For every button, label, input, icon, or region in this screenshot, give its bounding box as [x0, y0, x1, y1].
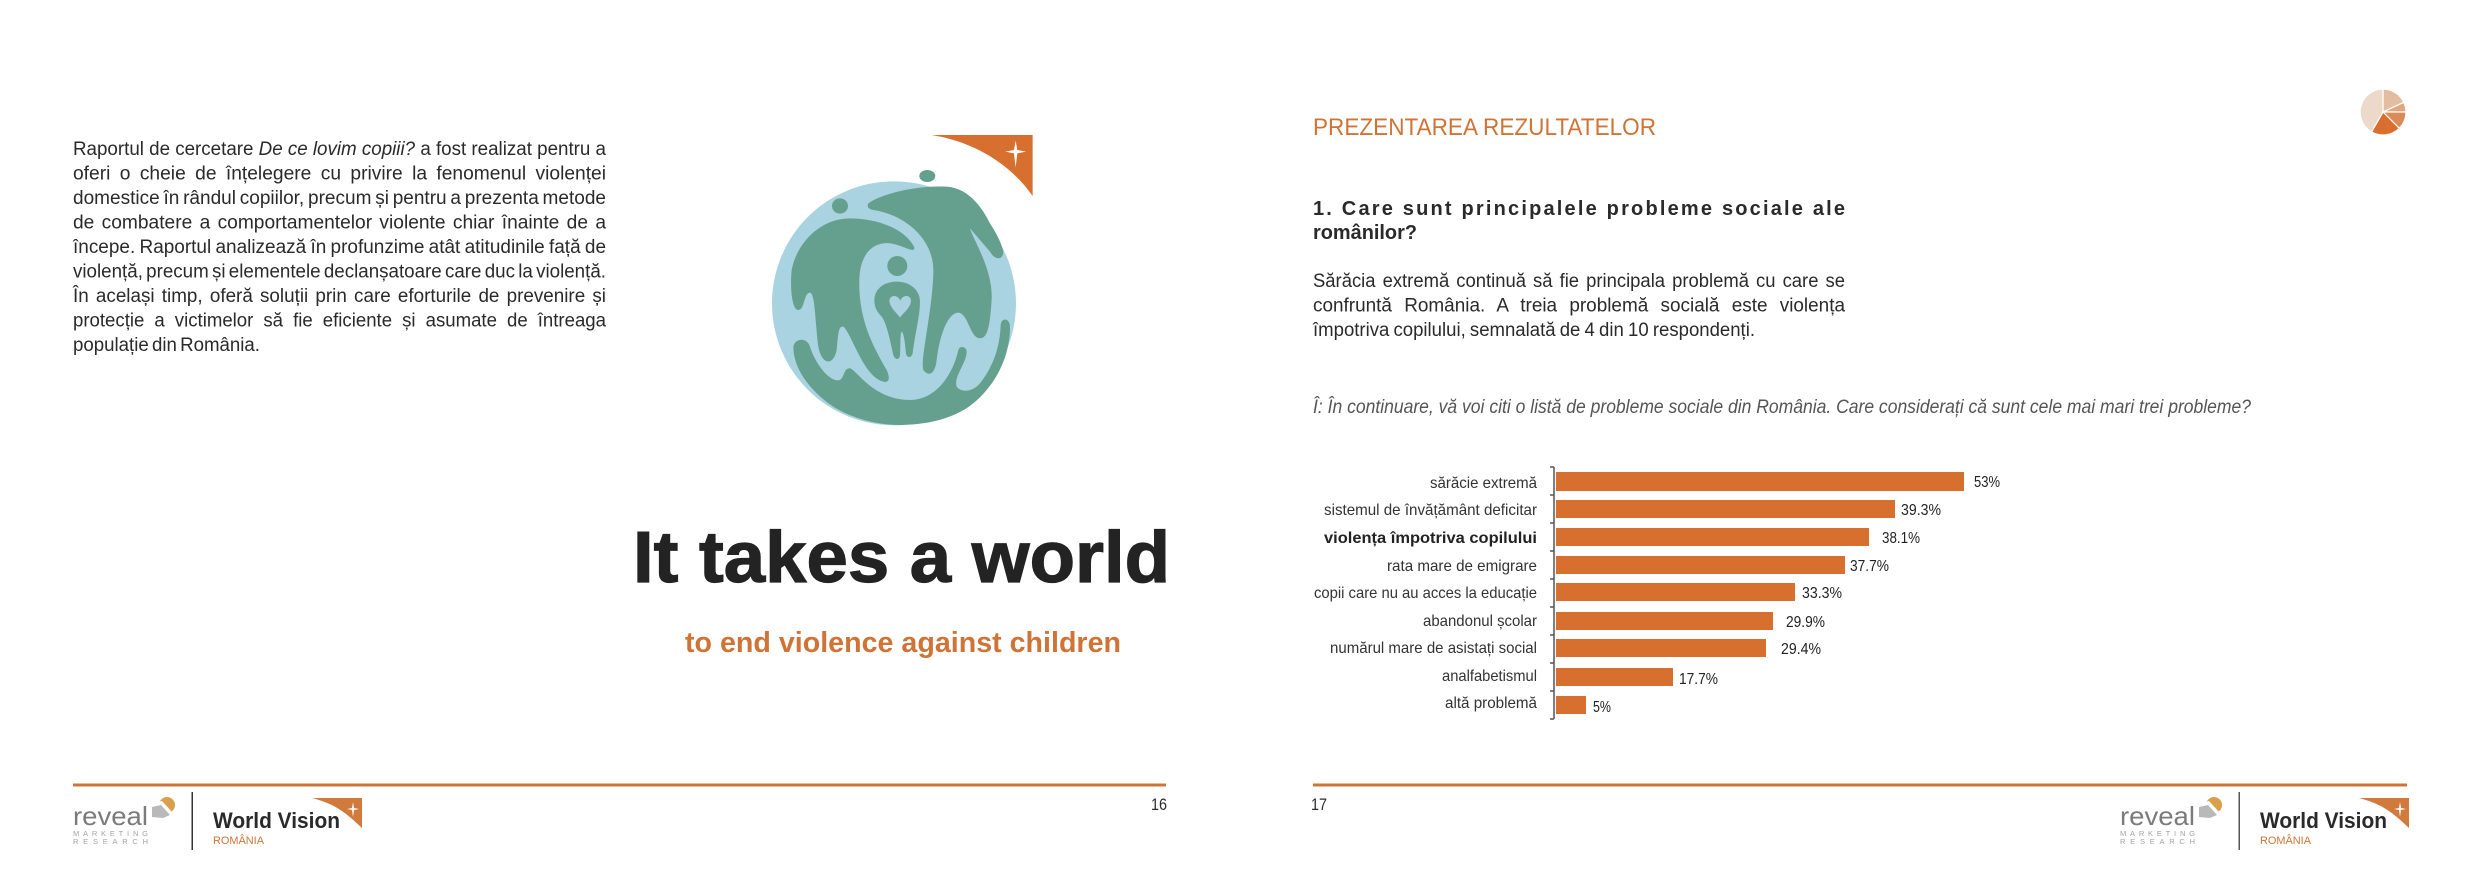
value labels	[1593, 474, 2000, 716]
logo: World Vision Romania: World Vision	[2260, 808, 2387, 833]
logo: World Vision Romania: World Vision	[213, 808, 340, 833]
category labels: copii care nu au acces la educație	[1314, 585, 1537, 602]
text block: findings	[1312, 271, 1845, 341]
logo: reveal marketing research: MARKETING	[73, 829, 148, 838]
page number 17: 17	[1311, 795, 1327, 814]
logo: reveal marketing research: RESEARCH	[73, 837, 148, 846]
category labels	[1314, 475, 1538, 712]
bars	[1556, 472, 1964, 714]
heading: question: românilor?	[1313, 222, 1417, 244]
logo: reveal marketing research: reveal	[73, 801, 148, 831]
logo: World Vision Romania: ROMÂNIA	[2260, 834, 2312, 847]
page number 16: 16	[1151, 795, 1167, 814]
text block: intro paragraph: domestice în rândul copiilor, precum și pentru a prezenta metode	[73, 188, 606, 209]
logo: World Vision Romania	[2260, 798, 2409, 847]
value labels: 37.7%	[1850, 558, 1889, 575]
text block: findings: împotriva copilului, semnalată de 4 din 10 respondenți.	[1312, 320, 1755, 341]
heading: question	[1313, 198, 1845, 244]
icon: globe with hands and child	[772, 135, 1033, 425]
text block: findings: confruntă România. A treia problemă socială este violența	[1313, 296, 1845, 316]
value labels: 33.3%	[1802, 585, 1842, 602]
logo: World Vision Romania: ROMÂNIA	[213, 834, 265, 847]
logo: reveal marketing research	[73, 797, 175, 846]
logo: World Vision Romania	[213, 798, 362, 847]
footer logos: right page	[2120, 792, 2409, 850]
value labels: 38.1%	[1882, 530, 1920, 547]
subtitle: to end violence against children	[685, 627, 1121, 659]
text block: intro paragraph: Raportul de cercetare De ce lovim copiii? a fost realizat pentru a	[73, 139, 606, 160]
value labels: 17.7%	[1679, 671, 1718, 688]
text block: survey question: Î: În continuare, vă voi citi o listă de probleme sociale din România. Care considerați că sunt cele mai mari trei probleme?	[1313, 396, 2251, 418]
text block: intro paragraph	[72, 139, 606, 356]
text block: intro paragraph: protecție a victimelor să fie eficiente și asumate de întreaga	[73, 310, 606, 332]
bar chart: social problems	[1314, 467, 2000, 719]
category labels: violența împotriva copilului	[1324, 530, 1537, 547]
icon: orange corner with star	[932, 135, 1033, 196]
value labels: 5%	[1593, 699, 1611, 716]
icon: section pie	[2360, 89, 2406, 135]
text block: intro paragraph: începe. Raportul analizează în profunzime atât atitudinile față de	[72, 237, 606, 258]
text block: intro paragraph: violență, precum și elementele declanșatoare care duc la violență.	[73, 262, 606, 282]
category labels: sistemul de învățământ deficitar	[1324, 502, 1538, 519]
value labels: 53%	[1974, 474, 2000, 491]
text block: intro paragraph: oferi o cheie de înțelegere cu privire la fenomenul violenței	[73, 164, 606, 184]
value labels: 29.4%	[1781, 641, 1821, 658]
logo: reveal marketing research: RESEARCH	[2120, 837, 2195, 846]
category labels: altă problemă	[1445, 695, 1537, 712]
heading: section title: PREZENTAREA REZULTATELOR	[1313, 114, 1656, 141]
value labels: 29.9%	[1786, 614, 1825, 631]
logo: reveal marketing research	[2120, 797, 2222, 846]
category labels: numărul mare de asistați social	[1330, 640, 1537, 657]
footer rule: left page	[73, 784, 1166, 786]
text block: findings: Sărăcia extremă continuă să fie principala problemă cu care se	[1313, 271, 1845, 292]
footer logos: left page	[73, 792, 362, 850]
category labels: sărăcie extremă	[1430, 475, 1537, 492]
chart axis	[1550, 467, 1554, 719]
heading: question: 1. Care sunt principalele probleme sociale ale	[1313, 198, 1845, 220]
value labels: 39.3%	[1901, 502, 1941, 519]
footer rule: right page	[1313, 784, 2407, 786]
category labels: rata mare de emigrare	[1387, 558, 1537, 575]
logo: reveal marketing research: MARKETING	[2120, 829, 2195, 838]
logo: reveal marketing research: reveal	[2120, 801, 2195, 831]
text block: intro paragraph: de combatere a comportamentelor violente chiar înainte de a	[73, 212, 606, 234]
category labels: abandonul școlar	[1423, 613, 1538, 630]
title: It takes a world	[633, 518, 1170, 598]
text block: intro paragraph: populație din România.	[73, 335, 260, 356]
text block: intro paragraph: În același timp, oferă soluții prin care eforturile de prevenire și	[72, 285, 606, 307]
category labels: analfabetismul	[1442, 668, 1537, 685]
